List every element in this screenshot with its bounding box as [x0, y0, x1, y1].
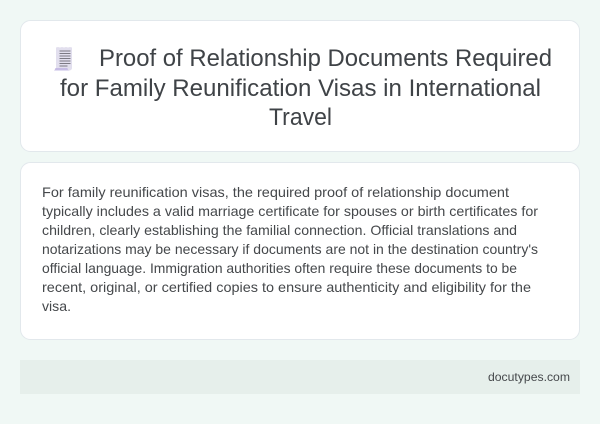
description text: typically includes a valid marriage certificate for spouses or birth certificates for [42, 203, 538, 219]
description text: official language. Immigration authorities often require these documents to be [42, 260, 517, 276]
title heading: Travel [269, 104, 332, 131]
icon: document scroll [54, 47, 72, 70]
title heading: for Family Reunification Visas in International [60, 75, 541, 102]
description text: visa. [42, 298, 71, 314]
footer source text: docutypes.com [488, 370, 570, 384]
description text: children, clearly establishing the familial connection. Official translations and [42, 222, 517, 238]
title heading: Proof of Relationship Documents Required [99, 45, 552, 72]
description text: notarizations may be necessary if documents are not in the destination country's [42, 241, 538, 257]
footer bar [20, 360, 580, 394]
panel: title card [20, 20, 580, 152]
description text [42, 184, 538, 314]
panel: description card [20, 162, 580, 340]
description text: recent, original, or certified copies to ensure authenticity and eligibility for the [42, 279, 531, 295]
title heading [60, 45, 552, 131]
description text: For family reunification visas, the required proof of relationship document [42, 184, 509, 200]
